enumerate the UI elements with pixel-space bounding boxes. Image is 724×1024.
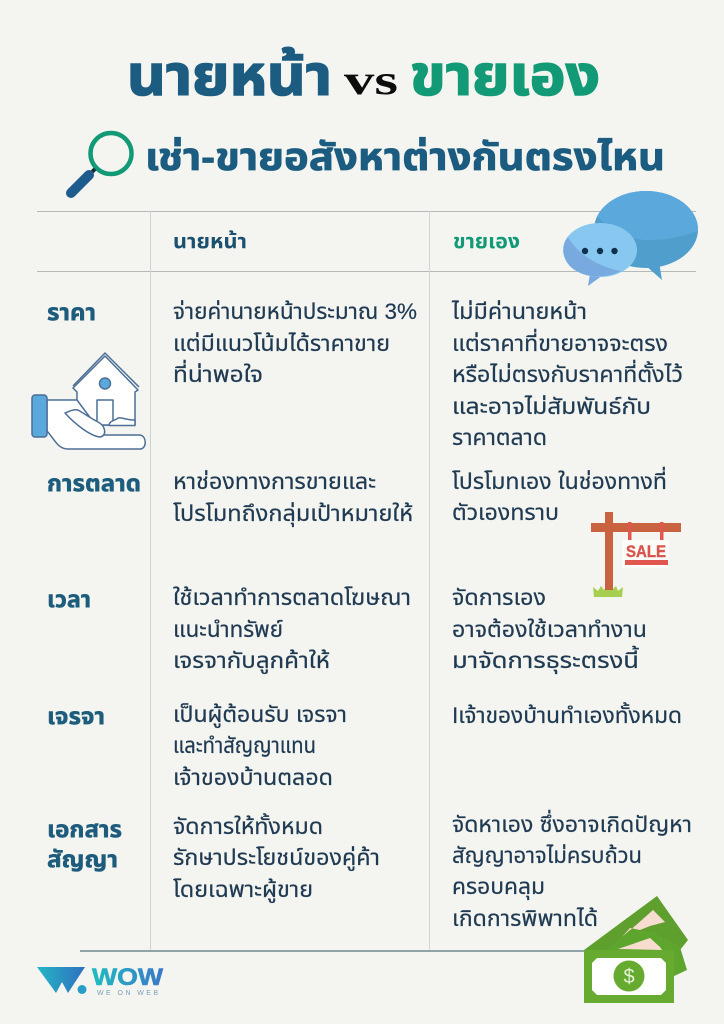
self-sell cell: time: มาจัดการธุระตรงนี้ <box>452 645 639 674</box>
broker cell: price: จ่ายค่านายหน้าประมาณ 3% <box>173 299 417 324</box>
column header: self-sell: ขายเอง <box>453 231 520 253</box>
broker cell: marketing <box>173 469 413 527</box>
row label: time: เวลา <box>47 586 91 612</box>
broker cell: time: เจรจากับลูกค้าให้ <box>173 648 330 674</box>
row: documents and contract <box>47 809 692 931</box>
self-sell cell: documents: ครอบคลุม <box>452 874 545 900</box>
row label: marketing: การตลาด <box>47 470 141 496</box>
self-sell cell: price: ราคาตลาด <box>452 425 547 450</box>
self-sell cell: documents: เกิดการพิพาทได้ <box>452 906 598 931</box>
self-sell cell: documents <box>452 809 692 931</box>
logo: WOW we on web: WOW <box>92 964 163 991</box>
row: marketing <box>47 466 667 527</box>
row: price <box>47 299 683 450</box>
icon: hand holding house <box>32 353 145 449</box>
self-sell cell: marketing: ตัวเองทราบ <box>452 500 559 525</box>
table grid <box>37 211 696 951</box>
broker cell: negotiation <box>173 702 347 790</box>
self-sell cell: price: แต่ราคาที่ขายอาจจะตรง <box>452 328 668 356</box>
broker cell: documents: โดยเฉพาะผู้ขาย <box>173 877 313 903</box>
self-sell cell: marketing <box>452 466 667 525</box>
column header: broker: นายหน้า <box>173 231 247 253</box>
broker cell: time: ใช้เวลาทำการตลาดโฆษณา <box>173 585 411 610</box>
icon: for sale sign <box>591 512 681 597</box>
self-sell cell: price <box>451 299 683 450</box>
logo: WOW we on web: WE ON WEB <box>97 990 158 997</box>
row: negotiation <box>47 701 682 790</box>
broker cell: documents <box>173 812 380 903</box>
icon: for sale sign: SALE <box>626 543 666 561</box>
icon: money: $ <box>623 966 635 988</box>
broker cell: time <box>173 585 411 674</box>
self-sell cell: marketing: โปรโมทเอง ในช่องทางที่ <box>452 466 667 494</box>
title: ขายเอง <box>410 44 600 107</box>
self-sell cell: time: จัดการเอง <box>452 585 546 610</box>
row label: documents and contract: เอกสาร <box>47 816 122 842</box>
icon: magnifying glass <box>71 133 132 193</box>
self-sell cell: price: และอาจไม่สัมพันธ์กับ <box>452 394 651 419</box>
icon: speech bubbles <box>563 185 702 286</box>
self-sell cell: price: ไม่มีค่านายหน้า <box>451 299 587 324</box>
broker cell: price: ที่น่าพอใจ <box>173 359 263 387</box>
broker cell: time: แนะนำทรัพย์ <box>173 617 283 642</box>
row label: price: ราคา <box>47 299 96 325</box>
broker cell: marketing: หาช่องทางการขายและ <box>173 469 376 494</box>
broker cell: negotiation: เจ้าของบ้านตลอด <box>173 765 333 790</box>
self-sell cell: time <box>452 585 647 674</box>
icon: money <box>584 896 688 1003</box>
row label: documents and contract <box>47 816 122 872</box>
subtitle: เช่า-ขายอสังหาต่างกันตรงไหน <box>145 137 665 179</box>
broker cell: documents: จัดการให้ทั้งหมด <box>173 812 323 839</box>
title: vs <box>344 58 398 104</box>
self-sell cell: time: อาจต้องใช้เวลาทำงาน <box>452 617 647 642</box>
broker cell: negotiation: และทำสัญญาแทน <box>173 733 316 758</box>
title <box>127 44 600 107</box>
row: time <box>47 585 647 674</box>
broker cell: documents: รักษาประโยชน์ของคู่ค้า <box>173 845 380 871</box>
self-sell cell: documents: สัญญาอาจไม่ครบถ้วน <box>452 843 642 868</box>
self-sell cell: price: หรือไม่ตรงกับราคาที่ตั้งไว้ <box>452 359 683 387</box>
self-sell cell: negotiation: Iเจ้าของบ้านทำเองทั้งหมด <box>452 701 682 728</box>
broker cell: price: แต่มีแนวโน้มได้ราคาขาย <box>173 331 390 356</box>
broker cell: marketing: โปรโมทถึงกลุ่มเป้าหมายให้ <box>173 501 413 527</box>
logo: WOW we on web <box>37 964 163 997</box>
row label: documents and contract: สัญญา <box>47 846 118 872</box>
broker cell: negotiation: เป็นผู้ต้อนรับ เจรจา <box>173 702 347 728</box>
self-sell cell: documents: จัดหาเอง ซึ่งอาจเกิดปัญหา <box>452 809 692 837</box>
broker cell: price <box>173 299 417 387</box>
row label: negotiation: เจรจา <box>47 703 105 729</box>
title: นายหน้า <box>127 44 332 107</box>
